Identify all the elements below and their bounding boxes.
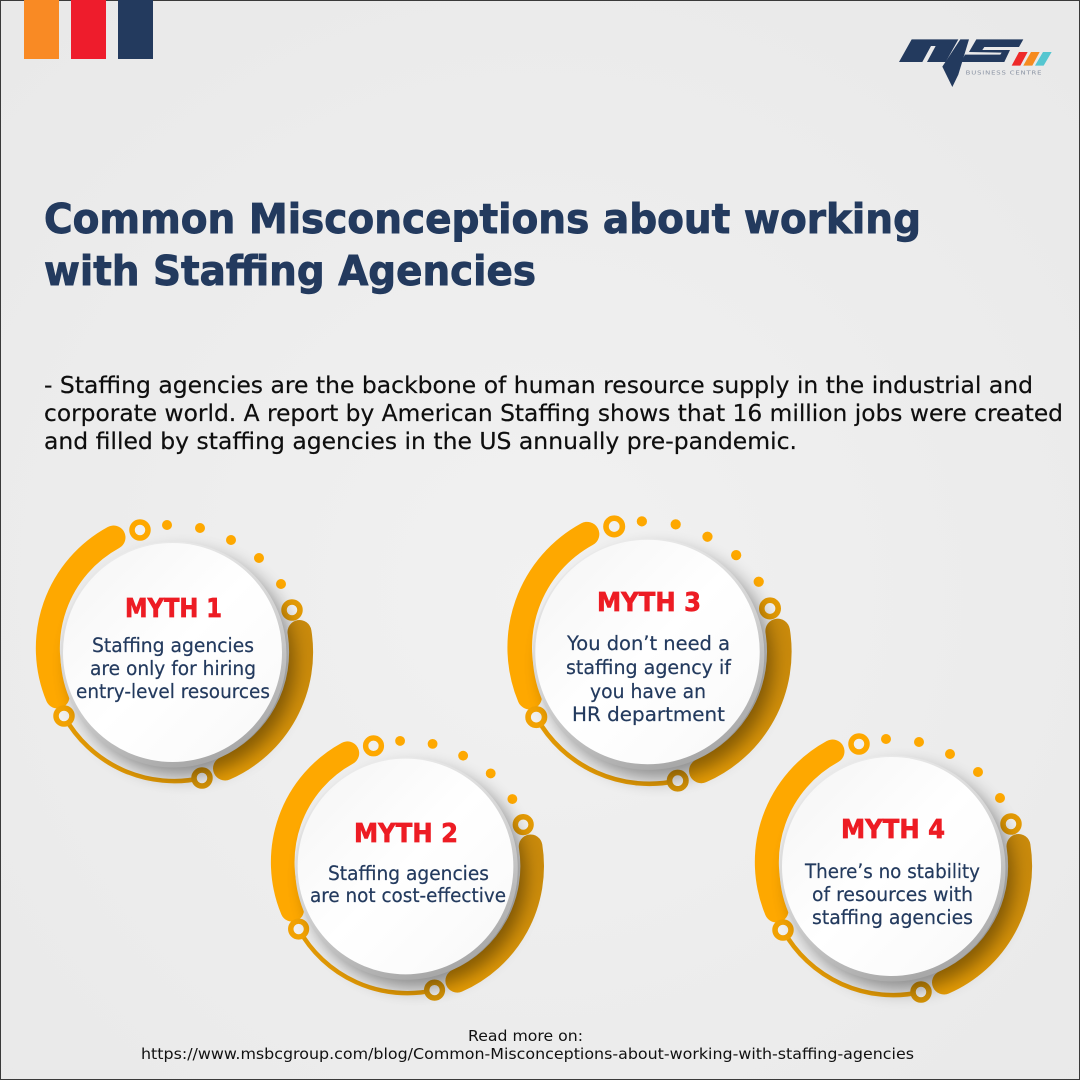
- panel: myth 3: [520, 516, 779, 789]
- title: with Staffing Agencies: [44, 247, 536, 295]
- footer: read more link: Read more on:: [468, 1027, 583, 1045]
- myth 4 text: [804, 860, 980, 929]
- myth 3 text: [566, 632, 732, 726]
- myth 2 text: Staffing agencies: [328, 862, 489, 885]
- myth 3 text: staffing agency if: [566, 656, 732, 679]
- panel: myth 4: [767, 734, 1020, 1000]
- intro paragraph: corporate world. A report by American Staffing shows that 16 million jobs were created: [44, 399, 1063, 427]
- title: Common Misconceptions about working: [44, 195, 921, 243]
- intro paragraph: - Staffing agencies are the backbone of human resource supply in the industrial and: [44, 371, 1033, 399]
- myth 4 ring graphic: [767, 734, 1020, 1000]
- panel: myth 1: [48, 520, 301, 786]
- intro paragraph: [44, 371, 1063, 455]
- myth 3 heading: MYTH 3: [597, 588, 701, 618]
- title: [44, 195, 921, 295]
- myth 4 heading: MYTH 4: [841, 815, 945, 845]
- decorative top colour blocks: [24, 0, 153, 59]
- myth 2 text: [310, 862, 506, 907]
- myth 2 text: are not cost-effective: [310, 884, 506, 907]
- footer: read more link: [141, 1027, 914, 1063]
- intro paragraph: and filled by staffing agencies in the US annually pre-pandemic.: [44, 427, 797, 455]
- myth 3 ring graphic: [520, 516, 779, 789]
- myth 4 text: staffing agencies: [812, 906, 973, 929]
- myth 3 text: you have an: [590, 680, 706, 703]
- myth 2 ring graphic: [283, 736, 532, 998]
- panel: myth 2: [283, 736, 532, 998]
- myth 1 text: [76, 634, 270, 703]
- myth 1 ring graphic: [48, 520, 301, 786]
- myth 3 text: HR department: [572, 703, 725, 726]
- myth 3 text: You don’t need a: [566, 632, 730, 655]
- footer: read more link: https://www.msbcgroup.com/blog/Common-Misconceptions-about-working-with-staffing-agencies: [141, 1045, 914, 1063]
- myth 4 text: of resources with: [812, 883, 973, 906]
- logo: MS Business Centre: [899, 39, 1052, 87]
- myth 4 text: There’s no stability: [804, 860, 980, 883]
- myth 1 text: entry-level resources: [76, 680, 270, 703]
- logo: MS Business Centre: BUSINESS CENTRE: [966, 70, 1042, 76]
- myth 1 text: Staffing agencies: [92, 634, 254, 657]
- myth 1 text: are only for hiring: [90, 657, 256, 680]
- myth 1 heading: MYTH 1: [125, 594, 222, 624]
- myth 2 heading: MYTH 2: [354, 819, 458, 849]
